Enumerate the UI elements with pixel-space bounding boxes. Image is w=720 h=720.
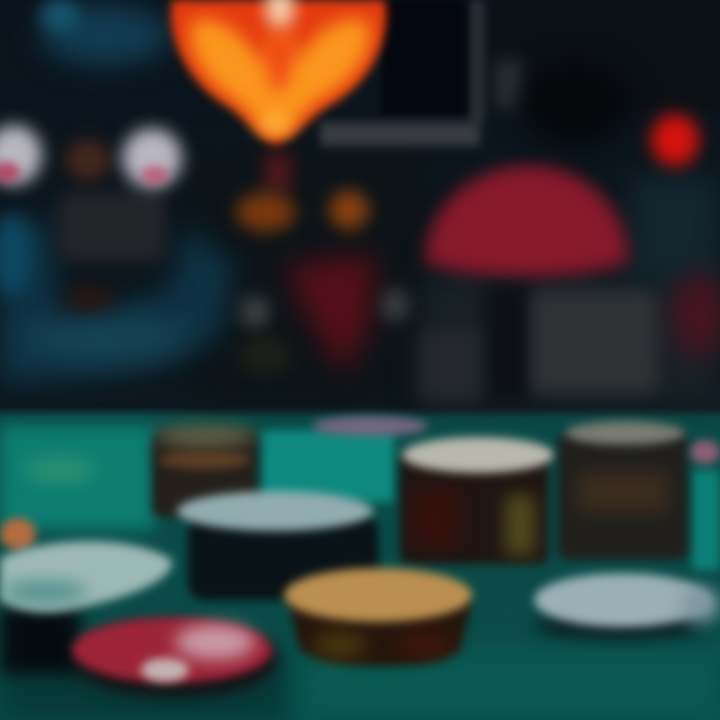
chip stack: back left xyxy=(152,424,257,517)
window frame: grey bars xyxy=(320,0,523,146)
red light xyxy=(651,114,699,166)
chip: far right pink xyxy=(690,440,720,464)
eye: left highlight xyxy=(0,125,42,185)
chip stack: middle white xyxy=(177,491,378,600)
center figure: orange and dark red blobs xyxy=(236,152,408,375)
chip stack: front orange xyxy=(284,568,472,666)
eye: right highlight xyxy=(122,128,182,188)
chip stack: center back xyxy=(400,437,554,564)
figure right: red dome xyxy=(420,63,720,400)
background: green table xyxy=(0,425,720,720)
chip: red and white front xyxy=(71,617,279,696)
chip: left orange xyxy=(0,518,36,550)
icon: glowing orange heart xyxy=(171,0,386,145)
background: dark room xyxy=(190,0,720,405)
figure left: blue silhouette xyxy=(0,0,235,385)
chip: back pink xyxy=(312,416,428,436)
chip stack: right white xyxy=(534,573,720,639)
chip stack: left white xyxy=(0,541,172,675)
chip stack: right back xyxy=(558,421,688,560)
